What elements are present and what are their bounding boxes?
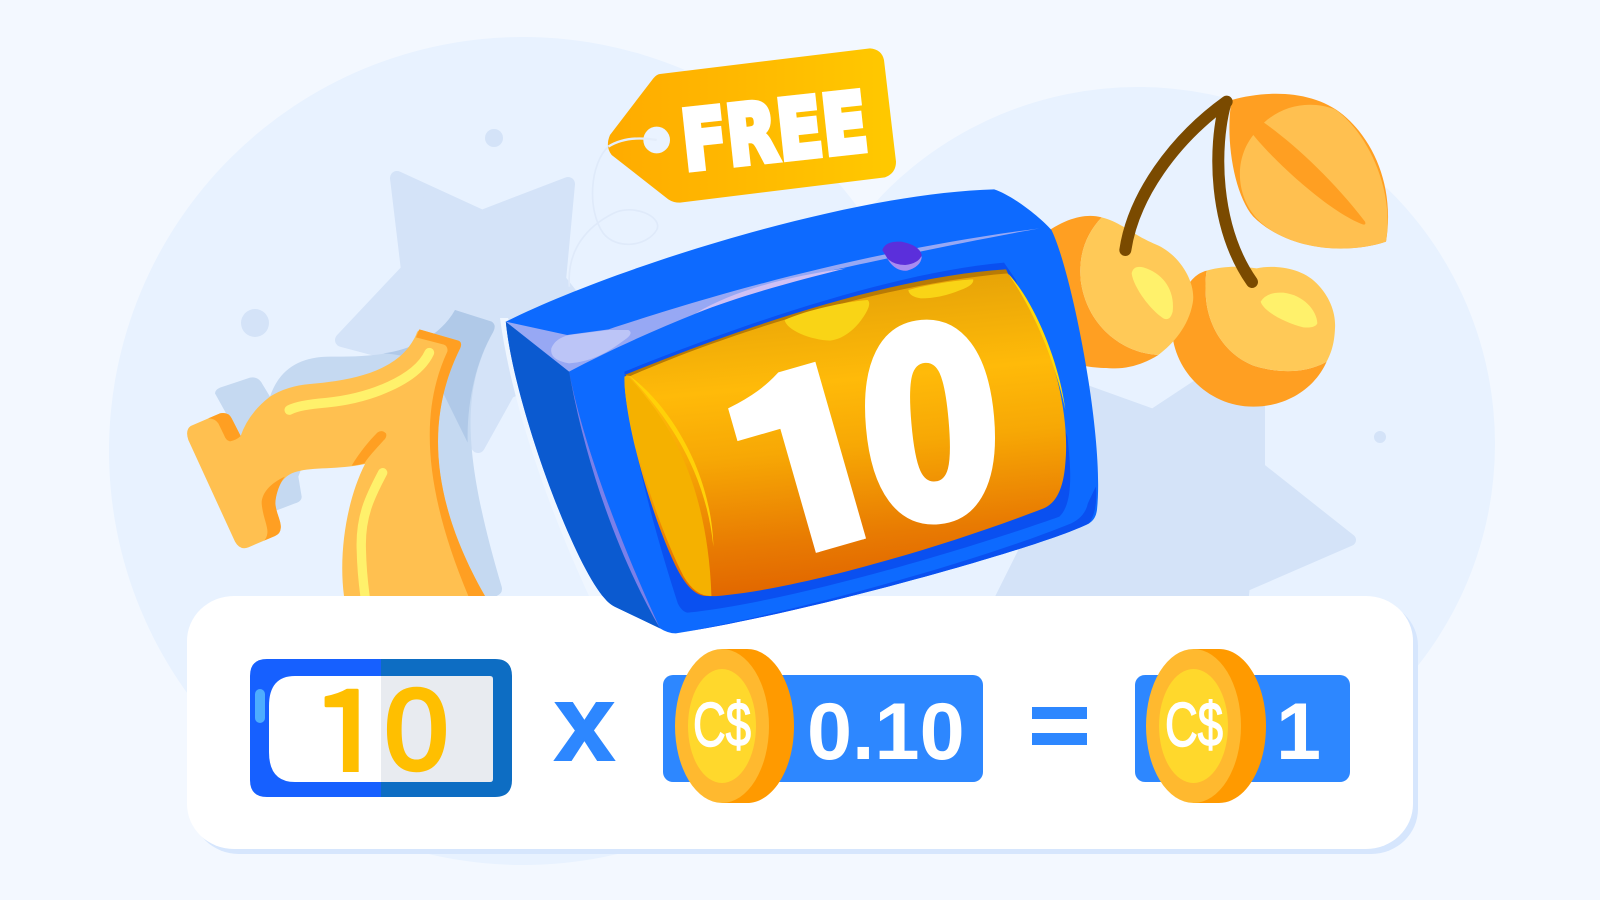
machine left face xyxy=(506,322,660,628)
background circle: left xyxy=(109,37,937,865)
reel number: 10 xyxy=(728,320,995,553)
price tag xyxy=(608,48,896,203)
cherry leaf xyxy=(1229,94,1388,249)
equation: coin value 0.10 xyxy=(663,649,983,803)
equation: spins display xyxy=(250,659,512,797)
equation: total value 1: C$ xyxy=(1165,691,1223,760)
decorative dots xyxy=(241,129,1386,443)
equals sign xyxy=(1032,707,1087,745)
slot machine screen xyxy=(506,189,1098,633)
star: left xyxy=(342,178,610,446)
tag label: FREE: FREE xyxy=(677,75,872,190)
multiplication sign: x xyxy=(554,662,615,783)
summary card xyxy=(187,596,1413,849)
summary card shadow xyxy=(192,601,1418,854)
equation: total value 1 xyxy=(1135,649,1350,803)
price tag string xyxy=(569,147,658,287)
icon: lucky seven xyxy=(187,329,485,596)
equation: spins display: 1 xyxy=(309,629,387,831)
star: right xyxy=(990,345,1350,620)
reel number: 10: 1 xyxy=(651,207,970,720)
machine button xyxy=(882,242,922,271)
icon: cherries xyxy=(1040,94,1388,407)
machine body xyxy=(506,189,1098,633)
machine left edge highlight xyxy=(569,372,660,628)
background circle: right xyxy=(781,87,1495,801)
equation: coin value 0.10: C$ xyxy=(693,691,751,760)
machine inner frame xyxy=(624,263,1070,613)
equation: total value 1: 1 xyxy=(1276,687,1321,777)
machine top shine xyxy=(506,228,1040,372)
equation: spins display: 0 xyxy=(385,667,448,794)
left cherry xyxy=(1040,216,1193,368)
reel xyxy=(624,269,1066,596)
seven shadow xyxy=(215,310,502,596)
infographic canvas xyxy=(109,37,1495,865)
equation: coin value 0.10: 0.10 xyxy=(807,687,965,777)
machine halo xyxy=(500,318,620,640)
reel number: 10: 0 xyxy=(848,271,1013,583)
cherry stems xyxy=(1125,102,1252,282)
right cherry xyxy=(1172,267,1335,407)
